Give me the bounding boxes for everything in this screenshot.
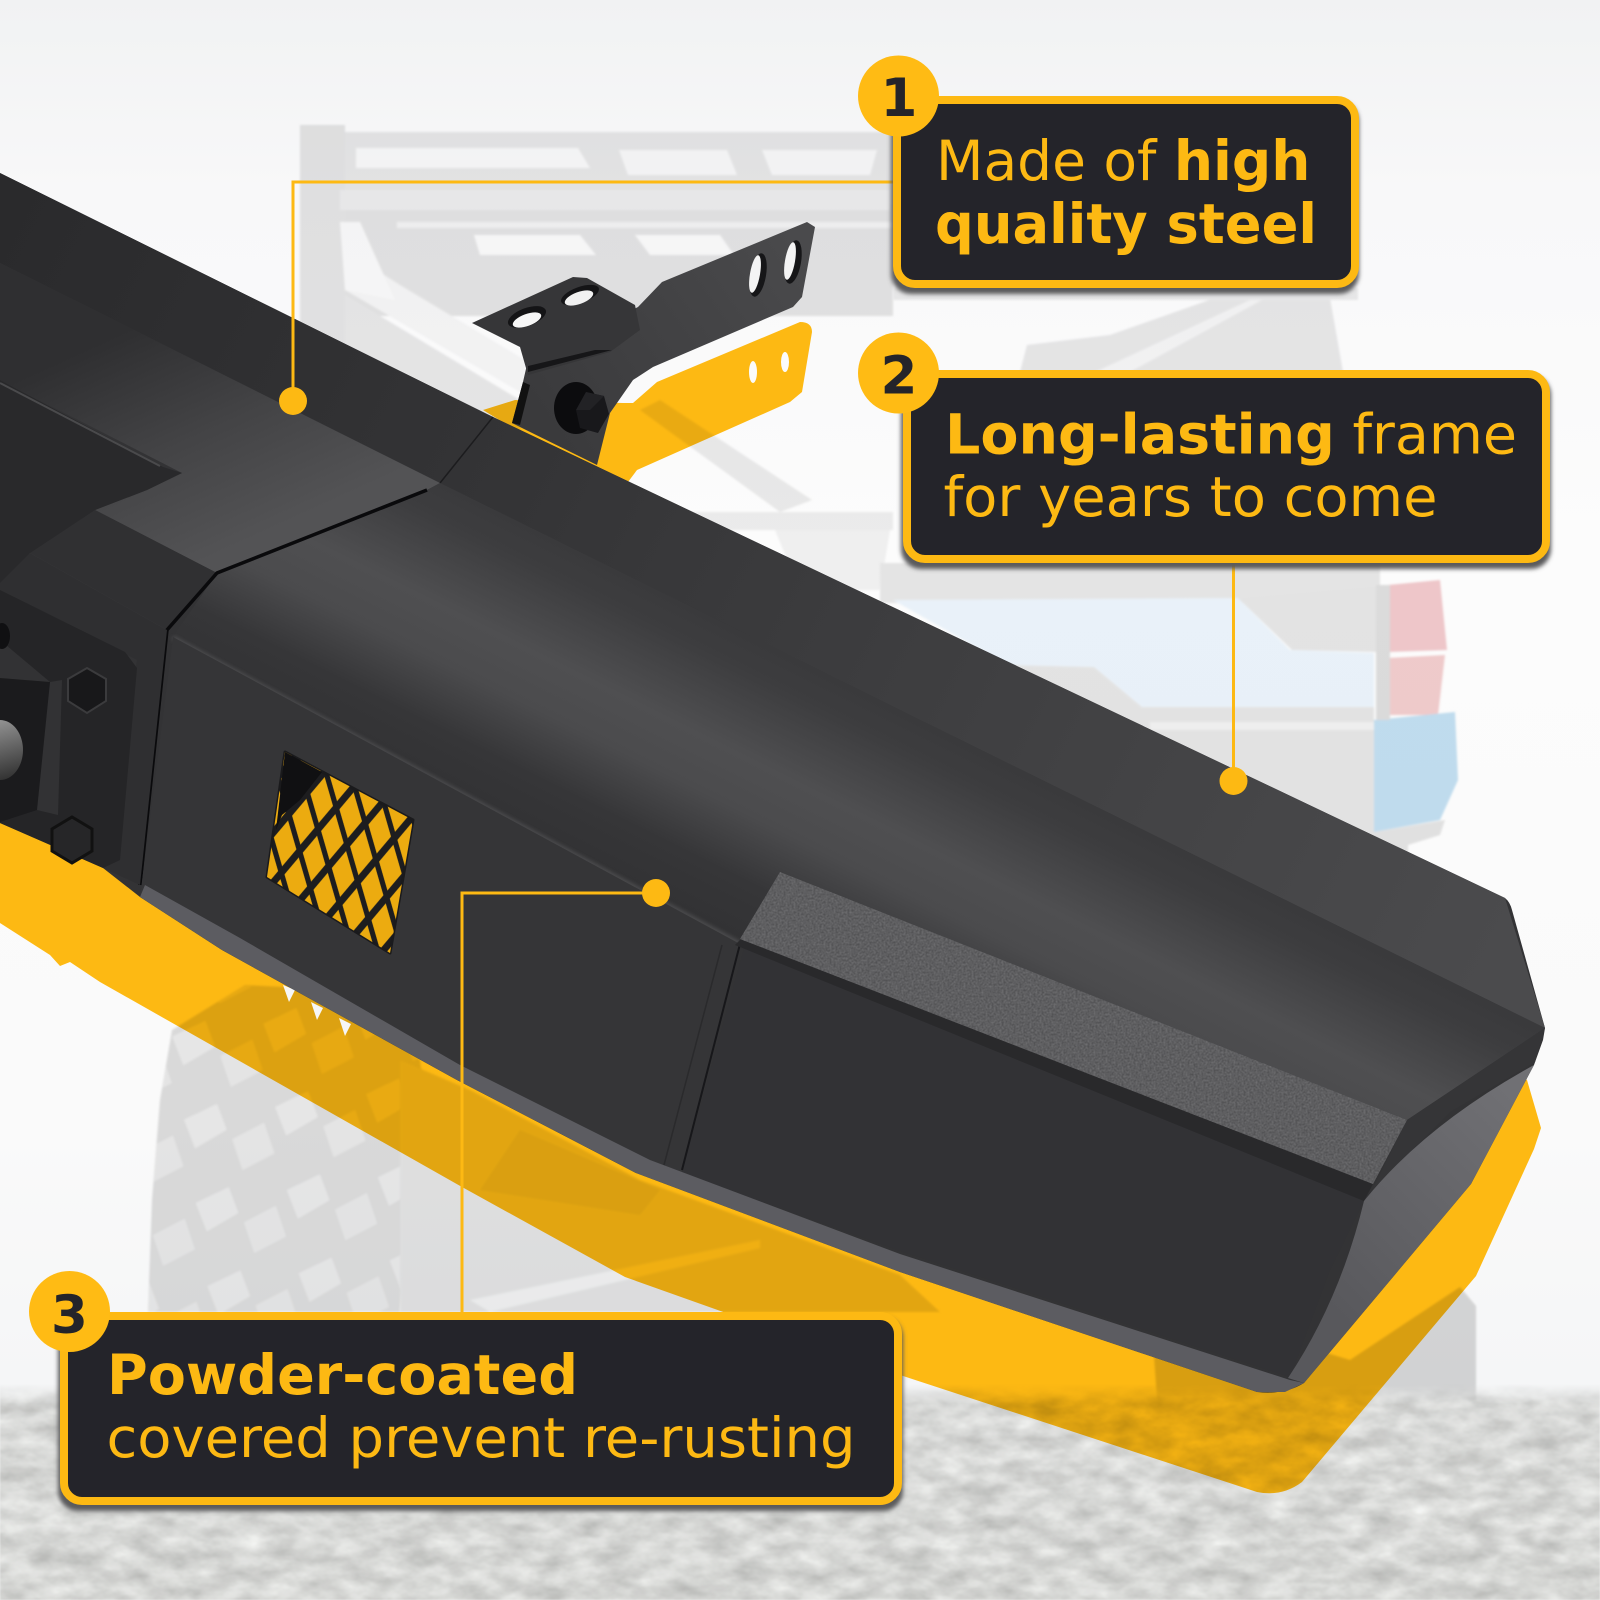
leader 3	[462, 879, 670, 1312]
recessed panel	[0, 380, 182, 583]
badge 2: 2	[881, 346, 917, 406]
textured bevel band	[735, 872, 1407, 1201]
chassis	[400, 1060, 1476, 1470]
bracket holes	[505, 239, 805, 332]
truck cab top right	[893, 288, 1358, 372]
front face right	[682, 945, 1364, 1377]
ground	[0, 1370, 1600, 1600]
side panel under the shoulder	[0, 553, 167, 885]
callout 3	[29, 1271, 903, 1511]
leader 1	[279, 182, 893, 415]
end face	[1288, 1065, 1534, 1383]
callout 3 text: covered prevent re-rusting	[106, 1406, 856, 1470]
badge 1	[858, 56, 939, 136]
callout 1	[858, 56, 1359, 294]
callout 2 text: Long-lasting frame	[945, 402, 1517, 466]
callout 1 text: Made of high	[936, 129, 1310, 193]
callout 3 text: Powder-coated	[107, 1343, 578, 1407]
yellow offset shadow of the bumper	[0, 322, 1541, 1493]
bumper	[0, 173, 1545, 1393]
main upper face	[173, 483, 1545, 1120]
callout 1 text: quality steel	[935, 192, 1317, 256]
bracket bolt	[554, 382, 609, 434]
truck tailgate	[880, 563, 1458, 880]
callout 2	[858, 332, 1551, 569]
callout 2 text: for years to come	[944, 465, 1438, 529]
badge 3	[29, 1271, 110, 1352]
hitch bolts	[68, 668, 106, 713]
left tire	[148, 985, 425, 1312]
callout 3 text	[106, 1343, 856, 1470]
shoulder panel	[30, 510, 217, 630]
hitch plate	[0, 590, 137, 868]
callout 1 text	[935, 129, 1317, 256]
bumper silhouette	[0, 173, 1545, 1393]
mounting bracket	[472, 222, 815, 465]
badge 2	[858, 332, 939, 414]
left upper face	[0, 263, 440, 573]
corner shading at the right end	[1372, 1028, 1545, 1190]
crease highlight	[173, 638, 740, 944]
front face left	[140, 637, 740, 1173]
leader 2	[1220, 563, 1248, 795]
top strip	[0, 173, 1545, 1028]
callout 2 text	[944, 402, 1517, 529]
badge 1: 1	[881, 68, 917, 129]
mesh vent	[267, 752, 413, 953]
white gaps behind the bumper	[283, 985, 351, 1036]
truck roof rack	[300, 125, 893, 645]
yellow offset shadow of the bracket	[483, 322, 812, 482]
vertical joint	[664, 944, 740, 1170]
badge 3: 3	[51, 1285, 88, 1346]
seam line	[140, 490, 427, 885]
lower lip	[140, 885, 1304, 1392]
